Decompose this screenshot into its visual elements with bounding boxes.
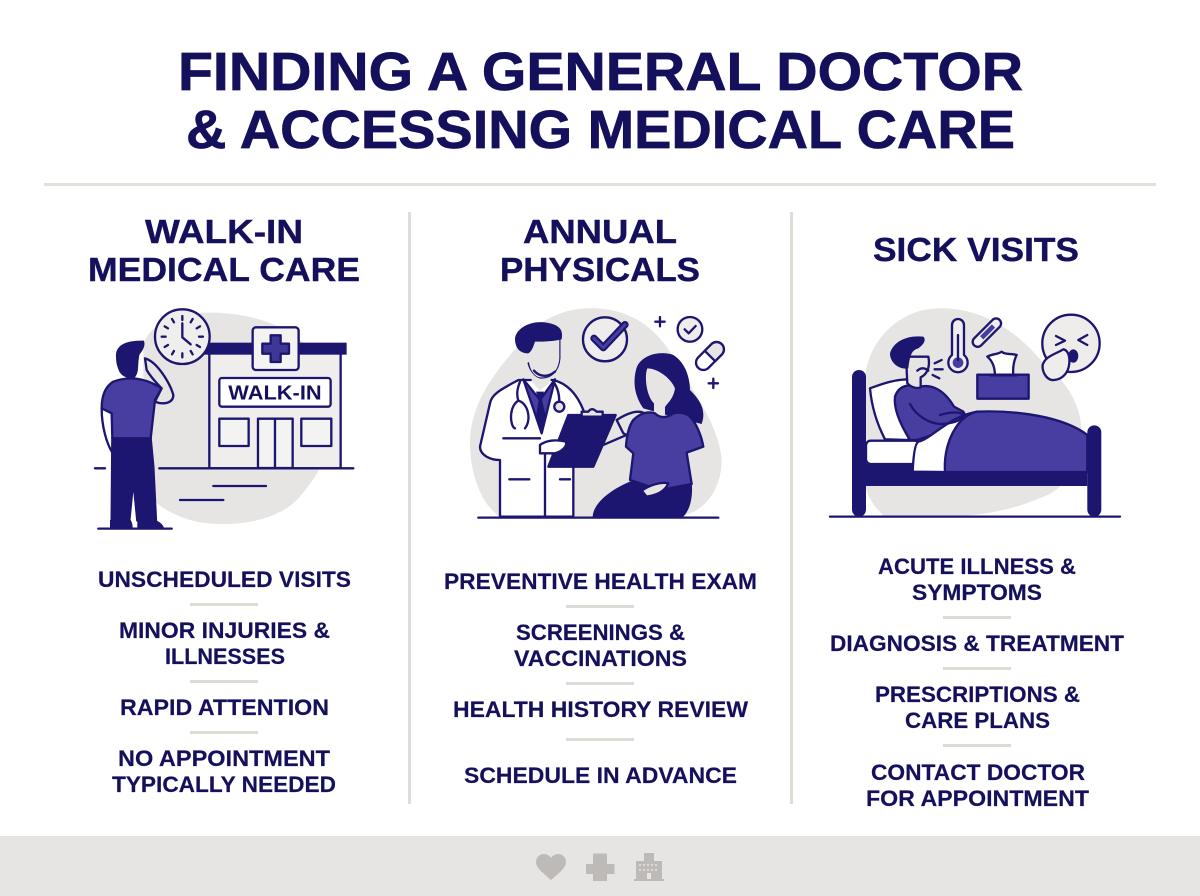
list: annual physical features: VACCINATIONS [514,646,687,671]
heading: walk-in medical care: MEDICAL CARE [88,252,360,289]
list: walk-in features [98,567,351,797]
icon: heart [536,854,566,880]
list: sick visit features [830,554,1124,811]
footer band [0,836,1200,896]
list: walk-in features: ILLNESSES [165,644,285,669]
heading: walk-in medical care: WALK-IN [145,214,303,251]
list: walk-in features: RAPID ATTENTION [120,695,329,720]
list: sick visit features: SYMPTOMS [912,580,1042,605]
list: walk-in features: UNSCHEDULED VISITS [98,567,351,592]
heading: sick visits: SICK VISITS [873,232,1079,269]
title: FINDING A GENERAL DOCTOR [178,42,1023,102]
heading: annual physicals [500,214,700,289]
list: sick visit features: DIAGNOSIS & TREATMENT [830,631,1124,656]
heading: walk-in medical care [88,214,360,289]
list: annual physical features: SCREENINGS & [516,620,685,645]
icon: cross [586,854,614,881]
list: sick visit features: PRESCRIPTIONS & [875,682,1080,707]
heading: annual physicals: PHYSICALS [500,252,700,289]
heading: annual physicals: ANNUAL [523,214,677,251]
list: sick visit features: ACUTE ILLNESS & [878,554,1076,579]
panel: walk-in medical care [88,214,360,797]
illustration: doctor with patient [470,308,727,518]
list: walk-in features: MINOR INJURIES & [119,618,330,643]
title [178,42,1023,160]
list: annual physical features [444,569,757,788]
list: walk-in features: NO APPOINTMENT [118,746,330,771]
title: & ACCESSING MEDICAL CARE [186,100,1015,160]
list: walk-in features: TYPICALLY NEEDED [112,772,336,797]
illustration: man checking a walk-in clinic: WALK-IN [228,381,322,404]
illustration: man checking a walk-in clinic [95,309,353,529]
list: annual physical features: SCHEDULE IN ADVANCE [464,763,737,788]
illustration: sick man in bed [830,308,1120,517]
panel: sick visits [830,232,1124,811]
panel: annual physicals [444,214,757,788]
list: annual physical features: HEALTH HISTORY REVIEW [453,697,749,722]
icon: hospital [634,853,664,881]
list: sick visit features: FOR APPOINTMENT [866,786,1089,811]
list: annual physical features: PREVENTIVE HEALTH EXAM [444,569,757,594]
list: sick visit features: CARE PLANS [905,708,1050,733]
list: sick visit features: CONTACT DOCTOR [871,760,1085,785]
